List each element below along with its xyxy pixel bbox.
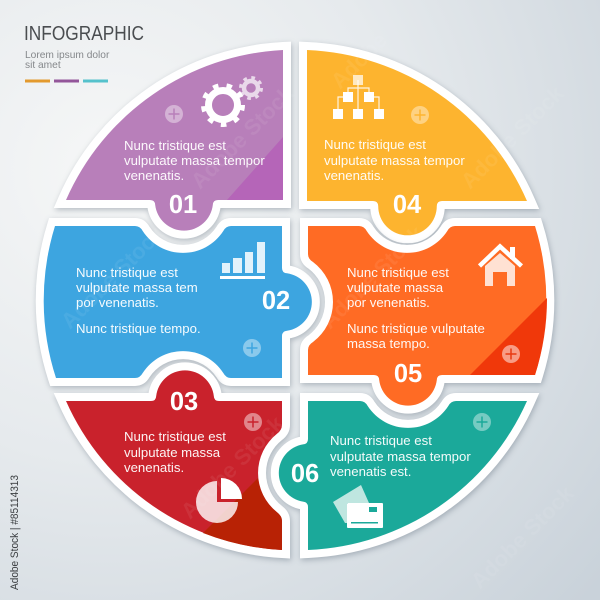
text block: vulputate massa: [347, 280, 444, 295]
text block: Nunc tristique est: [330, 433, 432, 448]
number: 04: [393, 191, 422, 219]
stock id: Adobe Stock | #85114313: [9, 475, 21, 590]
icon: pie chart: [196, 478, 242, 523]
icon: gears: [204, 78, 261, 124]
text block: venenatis est.: [330, 464, 411, 479]
text block: vulputate massa tem: [76, 280, 198, 295]
text block: Nunc tristique est: [124, 138, 226, 153]
text block: por venenatis.: [76, 295, 159, 310]
panel 06: teal: [279, 401, 527, 550]
text block: Nunc tristique tempo.: [76, 321, 201, 336]
colour key bars: [25, 80, 108, 82]
text block: [124, 138, 265, 183]
purple puzzle piece: [66, 50, 283, 231]
watermark: Adobe Stock: [466, 480, 579, 594]
panel 03: red: [66, 370, 282, 550]
icon: plus: [244, 413, 262, 431]
teal puzzle piece: [279, 401, 527, 550]
text block: vulputate massa tempor: [330, 449, 471, 464]
text block: Nunc tristique est: [347, 265, 449, 280]
red puzzle piece: [66, 370, 282, 550]
icon: plus: [473, 413, 491, 431]
text block: [324, 137, 465, 183]
orange puzzle piece: [308, 226, 546, 406]
text block: Nunc tristique est: [324, 137, 426, 152]
text block: vulputate massa tempor: [124, 153, 265, 168]
icon: bar chart: [220, 242, 265, 279]
watermark: Adobe Stock: [316, 220, 429, 334]
watermark: Adobe Stock: [186, 80, 299, 194]
text block: vulputate massa: [124, 445, 221, 460]
text block: Nunc tristique vulputate: [347, 321, 485, 336]
panel 01: purple: [66, 50, 283, 231]
text block: venenatis.: [124, 168, 184, 183]
watermark: Adobe Stock: [56, 220, 169, 334]
watermark: Adobe: [326, 27, 392, 94]
number: 03: [170, 388, 198, 416]
text block: venenatis.: [324, 168, 384, 183]
icon: house: [480, 246, 522, 286]
text block: Nunc tristique est: [124, 429, 226, 444]
purple shade: [227, 137, 283, 200]
icon: plus: [165, 105, 183, 123]
subtitle: Lorem ipsum dolor: [25, 50, 110, 61]
title: INFOGRAPHIC: [24, 23, 144, 45]
panel 04: yellow: [307, 50, 527, 235]
icon: cards: [333, 485, 383, 528]
number: 06: [291, 460, 319, 488]
orange shade: [470, 298, 547, 375]
yellow puzzle piece: [307, 50, 527, 235]
number: 01: [169, 191, 197, 219]
text block: vulputate massa tempor: [324, 153, 465, 168]
red shade: [203, 478, 282, 550]
text block: [347, 265, 485, 351]
watermark: Adobe Stock: [456, 80, 569, 194]
panel 02: blue: [44, 226, 312, 378]
icon: plus: [502, 345, 520, 363]
icon: plus: [243, 339, 261, 357]
text block: [76, 265, 201, 336]
subtitle: sit amet: [25, 60, 61, 71]
text block: massa tempo.: [347, 336, 430, 351]
icon: plus: [411, 106, 429, 124]
header: infographic title block: [24, 23, 144, 82]
number: 05: [394, 360, 422, 388]
text block: venenatis.: [124, 460, 184, 475]
number: 02: [262, 287, 290, 315]
text block: por venenatis.: [347, 295, 430, 310]
text block: Nunc tristique est: [76, 265, 178, 280]
blue puzzle piece: [44, 226, 312, 378]
watermark: Adobe Stock: [176, 410, 289, 524]
text block: [124, 429, 226, 475]
icon: org chart: [333, 75, 384, 119]
text block: [330, 433, 471, 479]
panel 05: orange: [308, 226, 547, 406]
subtitle: [25, 50, 110, 71]
